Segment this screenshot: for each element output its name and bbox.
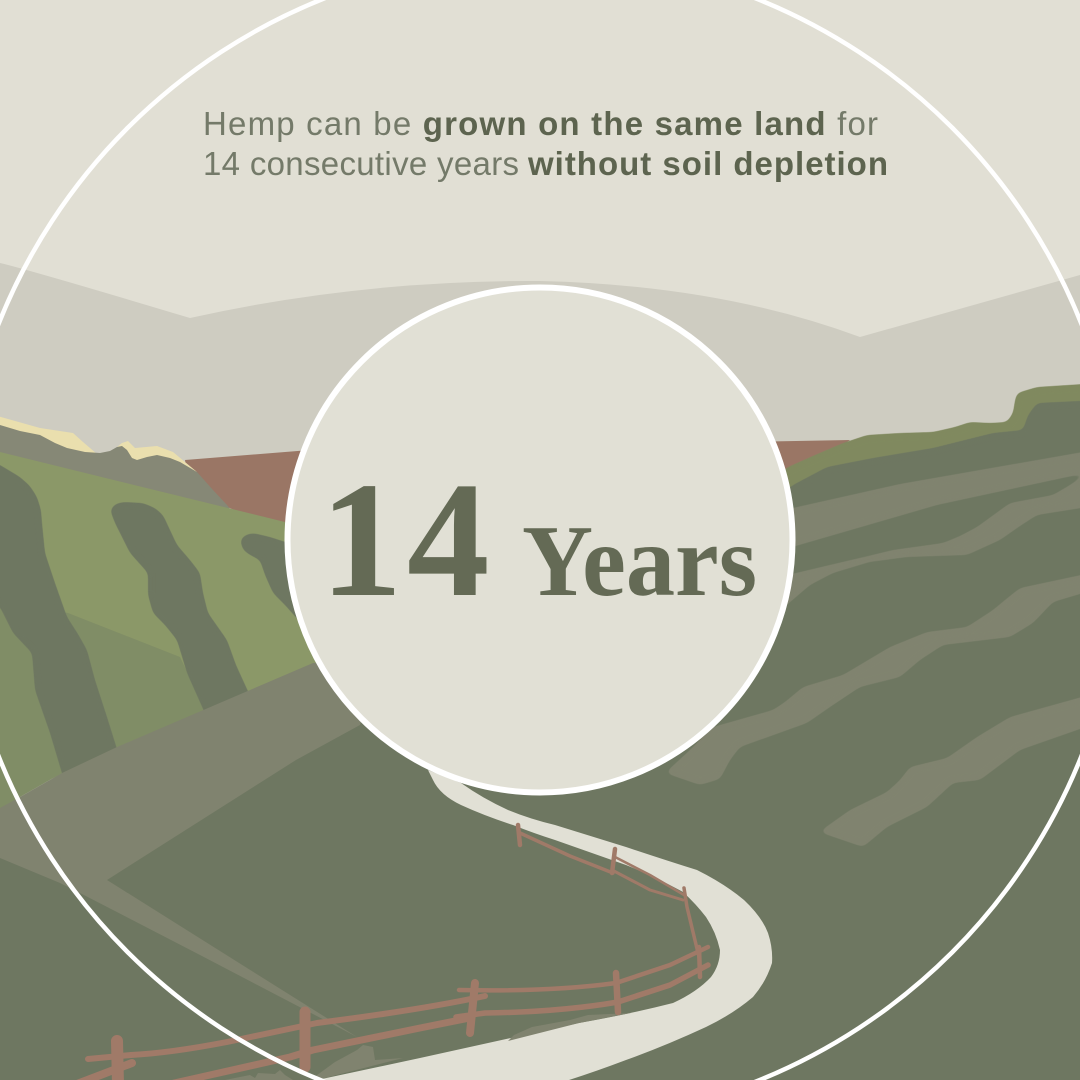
big number label bbox=[320, 448, 757, 631]
headline line two, bold part: without soil depletion bbox=[527, 145, 888, 182]
grey ridge bbox=[0, 425, 235, 515]
number 14: 14 bbox=[320, 448, 490, 631]
furrow four bbox=[819, 692, 1080, 847]
headline line one: Hemp can be grown on the same land for bbox=[203, 105, 878, 142]
word Years: Years bbox=[522, 505, 757, 618]
headline text bbox=[203, 105, 888, 182]
tuft near bottom bbox=[313, 1045, 403, 1080]
headline line two, regular part: 14 consecutive years bbox=[203, 145, 519, 182]
distant mountains bbox=[0, 263, 1080, 620]
furrow one bbox=[775, 449, 1080, 552]
centre circle bbox=[288, 288, 792, 792]
furrow three bbox=[665, 571, 1080, 785]
light green hillside bbox=[0, 452, 330, 810]
fence rails bbox=[77, 833, 708, 1080]
roadside grass tufts bbox=[225, 1013, 631, 1080]
strip two bbox=[110, 502, 252, 720]
left hills bbox=[0, 414, 330, 810]
mid green hillside bbox=[0, 600, 205, 810]
fence posts bbox=[117, 825, 700, 1080]
grey furrow bands bbox=[665, 449, 1080, 847]
strip three bbox=[240, 533, 325, 650]
right hills bbox=[0, 383, 1080, 1080]
strip one bbox=[0, 455, 122, 790]
wooden fence bbox=[77, 825, 708, 1080]
yellow ridge highlights bbox=[0, 414, 197, 472]
tuft fragments bbox=[225, 1070, 293, 1080]
green hill crest bbox=[770, 383, 1080, 520]
tuft near bend bbox=[508, 1013, 631, 1041]
dark crop strips bbox=[0, 455, 325, 790]
brown field bbox=[185, 440, 850, 540]
dark right slope bbox=[0, 400, 1080, 1080]
furrow two bbox=[775, 465, 1080, 615]
grey road band and wedge bbox=[0, 660, 380, 1037]
winding cream road bbox=[317, 770, 772, 1080]
